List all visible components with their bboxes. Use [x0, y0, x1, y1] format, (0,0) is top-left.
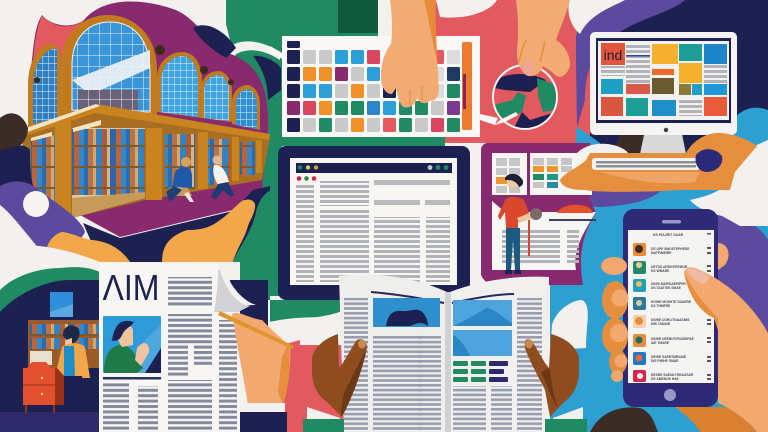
green and navy data bars	[453, 361, 508, 382]
small left window	[28, 44, 60, 128]
list items: DSHIE UOHLITNAASIMS	[651, 318, 690, 322]
list items: DSHIE UEENUTIPIUSEIPAE	[651, 337, 695, 341]
list items: DEHIE SAENTMENAIE	[651, 355, 687, 359]
open newspaper text columns	[344, 298, 542, 432]
floor	[0, 412, 100, 432]
lower bookshelves	[20, 104, 270, 218]
icon: hand on keyboard and mouse	[560, 133, 757, 192]
list items: AIE TMARE	[651, 341, 670, 345]
list items	[633, 243, 695, 382]
icon: fingers gripping phone	[601, 257, 628, 382]
colour swatch card	[530, 153, 592, 195]
panel: small room scene	[0, 267, 100, 432]
open newspaper header rules	[371, 292, 514, 303]
masthead tile: ind	[604, 47, 622, 63]
walking reader	[211, 156, 234, 199]
list items: DS UPE SMOSTEPHEDE	[651, 247, 690, 251]
ornaments between windows	[34, 45, 234, 85]
panel: smartphone with list	[623, 209, 718, 407]
navy block behind newspaper	[230, 280, 268, 345]
list action marks	[707, 233, 711, 380]
newspaper photo	[103, 316, 161, 373]
room bookshelf	[28, 320, 100, 368]
panel: colour palette grid	[270, 36, 498, 137]
status dots	[297, 176, 316, 181]
navy accent	[193, 25, 236, 58]
lower document card	[492, 201, 596, 270]
list items: DS TAATGEI SMAE	[651, 286, 682, 290]
icon: thumb and palm holding phone	[675, 243, 768, 432]
masthead tile	[601, 43, 625, 65]
list items: DGHIE MOSHTE SDAERE	[651, 300, 692, 304]
red dresser	[23, 362, 64, 413]
woman figure	[498, 174, 542, 274]
palette row 3	[287, 84, 460, 98]
panel: tablet with document	[278, 146, 470, 300]
icon: colour wheel held by hand	[492, 0, 570, 130]
library backdrop blob	[28, 1, 268, 237]
large arched window	[60, 15, 157, 125]
list items: DS AMENOE HAE	[651, 377, 680, 381]
left edge blobs	[0, 113, 85, 250]
panel: open newspaper	[339, 274, 549, 432]
palette row 2	[287, 67, 460, 81]
red accent	[30, 15, 84, 118]
upper card	[492, 153, 527, 195]
right arched windows	[157, 52, 260, 130]
tablet toolbar	[296, 163, 452, 173]
palette row 4	[287, 101, 460, 115]
list items: DS WMARE	[651, 269, 670, 273]
document text	[296, 180, 450, 282]
icon: hand pointing on palette	[381, 0, 439, 107]
panel: desktop monitor with magazine spread	[590, 32, 737, 154]
mouse	[695, 149, 722, 172]
newspaper masthead: ΛΙΜ	[102, 267, 160, 308]
palette row 1	[287, 50, 460, 64]
white dot	[23, 191, 49, 217]
palette row 5	[287, 118, 460, 132]
magazine tiles	[601, 44, 727, 116]
icon: right hand holding newspaper	[525, 334, 587, 432]
newspaper spread photos	[373, 298, 512, 356]
orange and navy clouds	[0, 186, 280, 285]
icon: hand with pen	[218, 311, 300, 432]
panel: presenter on magenta board	[481, 143, 596, 285]
list items: UETDS ARDHTIFEMOR	[651, 265, 688, 269]
curled page corner	[214, 264, 256, 312]
panel: library illustration	[20, 1, 270, 237]
monitor stand	[640, 134, 686, 154]
newspaper columns	[103, 277, 237, 432]
keyboard	[592, 158, 700, 170]
list items: MIS TAMAIE	[651, 322, 671, 326]
list items: DESHE SAEIAH RHAOSAR	[651, 373, 694, 377]
room window	[50, 292, 73, 317]
list items: DINIS MAPIDAEPIPER	[651, 282, 686, 286]
panel: left newspaper page	[99, 262, 256, 432]
list items: MATPIMEIRE	[651, 251, 672, 255]
phone header: DS PIAJRIT SAAR	[653, 233, 684, 237]
standing person	[57, 326, 90, 412]
orange scroll bar	[462, 42, 472, 130]
seated reader	[166, 157, 194, 202]
list items: DIS PMIHE SMAE	[651, 359, 679, 363]
icon: left hand holding newspaper	[303, 334, 367, 432]
dark blob beneath phone	[590, 407, 658, 432]
list items: DS THMFRE	[651, 304, 671, 308]
white sleeve cloud at right	[690, 140, 768, 226]
